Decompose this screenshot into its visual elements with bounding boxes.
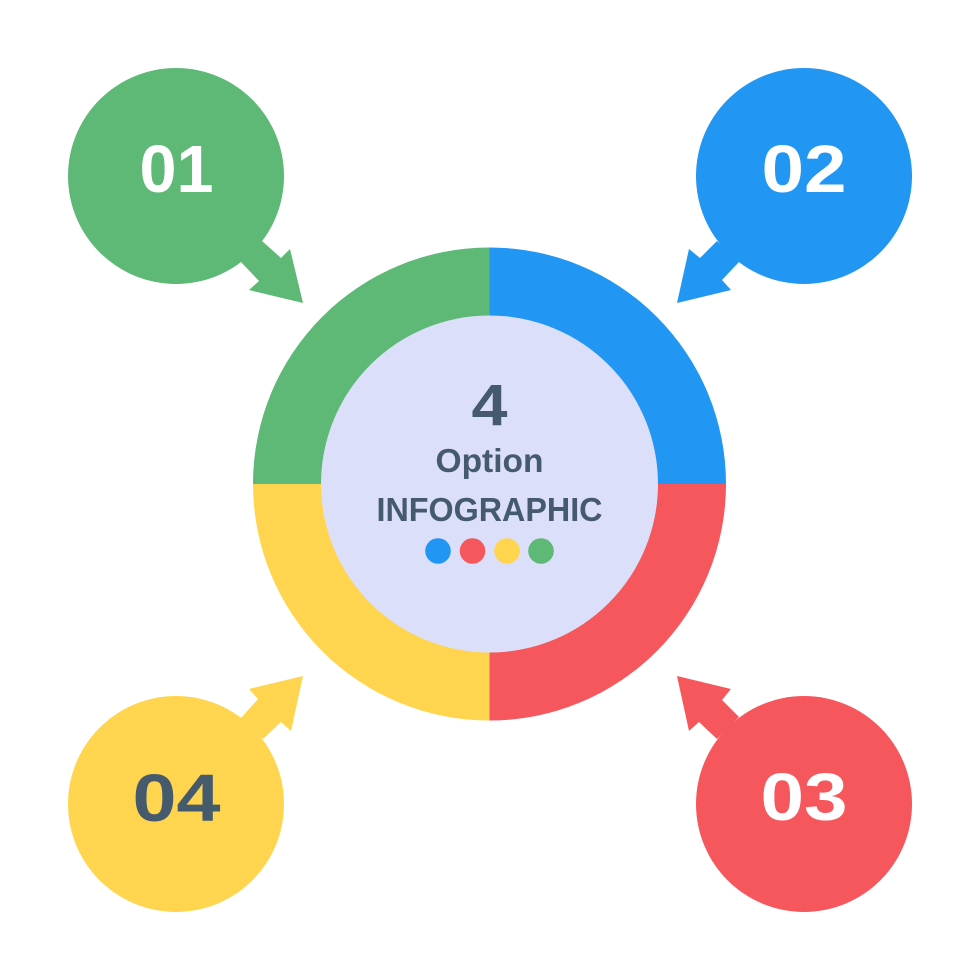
label 03: 03 [760, 760, 848, 835]
callout 03 [677, 676, 912, 912]
heading: INFOGRAPHIC: INFOGRAPHIC [376, 491, 602, 528]
arrow 01 [241, 241, 303, 303]
label 01: 01 [140, 132, 214, 207]
center panel [321, 316, 658, 652]
central ring [253, 248, 726, 720]
circle 01 [68, 68, 284, 284]
callout 02 [677, 68, 912, 303]
ring segment: yellow [253, 484, 490, 720]
callout 04 [68, 676, 303, 912]
ring segment: blue [490, 248, 726, 484]
colour dots [425, 538, 554, 564]
callout 01 [68, 68, 303, 303]
label 02: 02 [762, 132, 846, 207]
circle 02 [696, 68, 912, 284]
arrow 03 [677, 676, 739, 739]
circle 04 [68, 696, 284, 912]
ring segment: green [253, 248, 490, 484]
label 04: 04 [132, 761, 220, 836]
number 4: 4 [472, 373, 508, 438]
circle 03 [696, 696, 912, 912]
center disc [321, 316, 658, 652]
arrow 04 [241, 676, 303, 739]
arrow 02 [677, 241, 739, 303]
heading: Option: Option [436, 442, 544, 479]
ring segment: red [490, 484, 726, 720]
